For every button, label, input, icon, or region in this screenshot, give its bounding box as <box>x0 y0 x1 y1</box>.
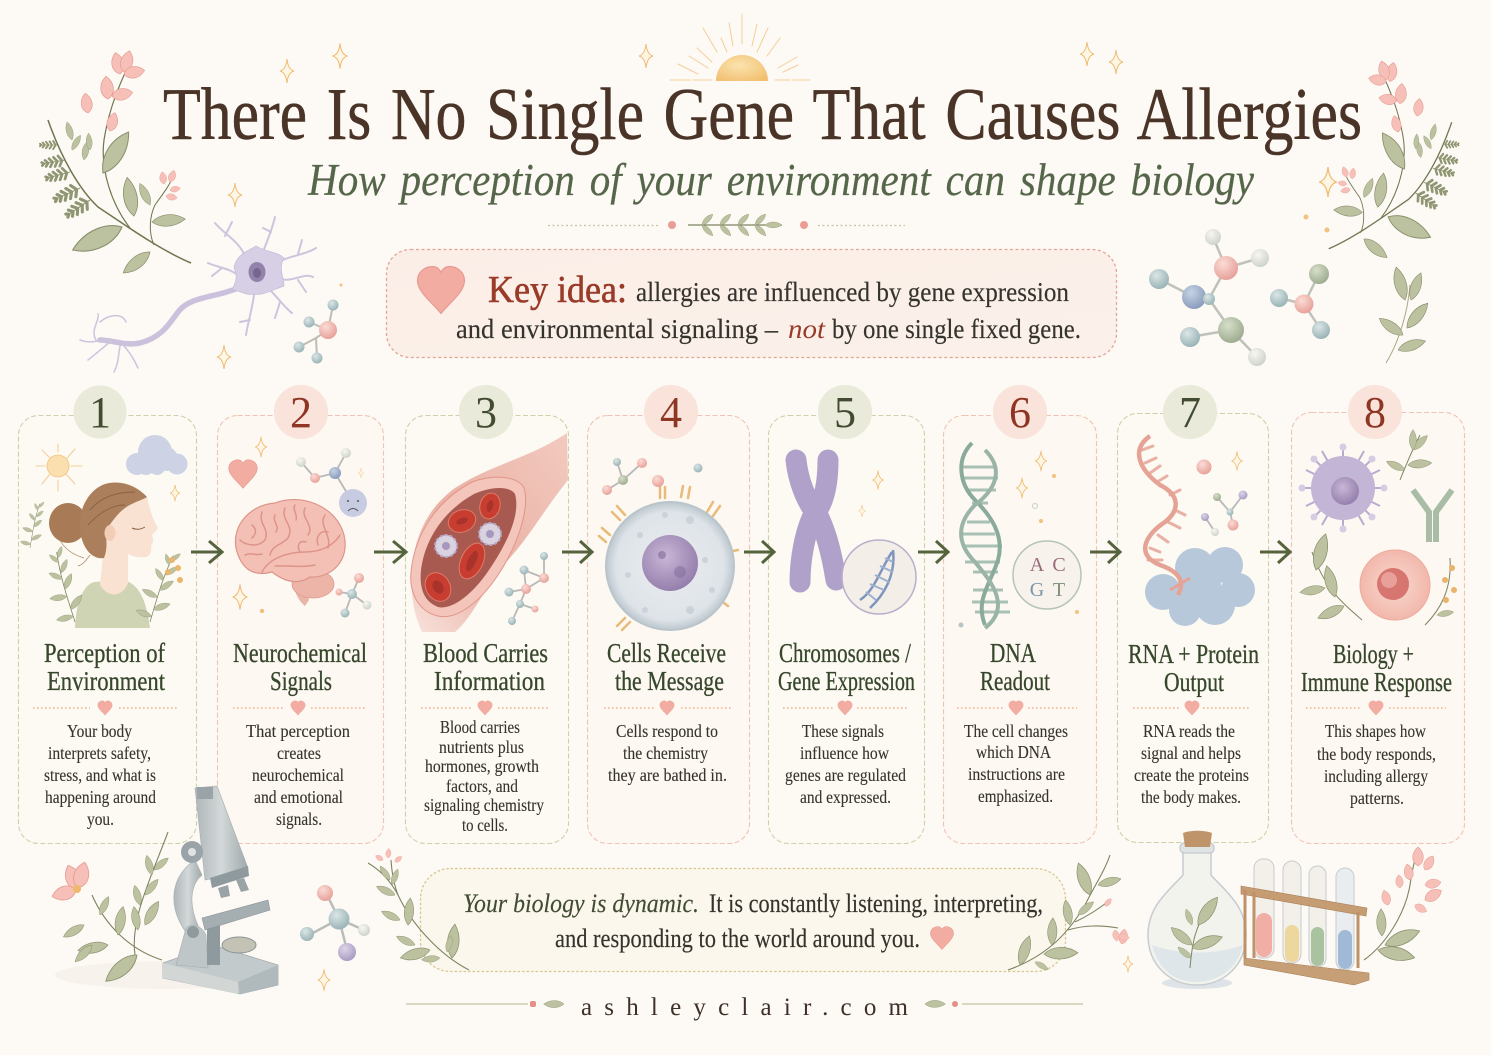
body text: Your body <box>67 721 132 741</box>
icon: cloud <box>126 435 188 475</box>
illustration: plants beside woman <box>16 485 183 630</box>
decoration: top-right floral branch <box>1329 60 1459 262</box>
divider with heart <box>957 701 1077 715</box>
body text: That perception <box>246 721 350 741</box>
heading: Cells Receive <box>607 638 726 668</box>
illustration: lower-left plant with flower <box>50 832 275 989</box>
body text <box>246 721 350 829</box>
divider with heart <box>421 701 550 715</box>
panel: key idea callout: not <box>788 314 827 344</box>
icon: heart <box>930 926 954 950</box>
body text <box>424 717 544 835</box>
panel: key idea callout: by one single fixed gene. <box>832 314 1081 344</box>
panel: closing message: and responding to the world around you. <box>555 924 920 953</box>
body text: nutrients plus <box>439 737 524 757</box>
illustration: lower-right plant with buds <box>1364 847 1444 964</box>
illustration: neuron <box>80 217 316 372</box>
body text: they are bathed in. <box>608 765 727 785</box>
arrow 2 to 3 <box>374 541 406 563</box>
divider with heart <box>33 701 179 715</box>
body text: and expressed. <box>800 787 891 807</box>
divider with heart <box>783 701 907 715</box>
body text <box>44 721 156 829</box>
body text: interprets safety, <box>48 743 151 763</box>
icon: sparkles <box>958 451 1079 628</box>
footer: website: ashleyclair.com <box>581 994 909 1021</box>
body text: Blood carries <box>440 717 520 737</box>
step 2 badge <box>274 385 328 439</box>
subtitle: How perception of your environment can shape biology <box>307 155 1254 205</box>
arrow 3 to 4 <box>562 541 592 563</box>
illustration: test tube rack <box>1241 859 1369 985</box>
step 8 panel: Biology + Immune Response <box>1292 385 1464 844</box>
step 2 panel: Neurochemical Signals: Signals <box>270 666 332 696</box>
icon: small sparkle lower right <box>1123 956 1133 972</box>
illustration: cell with receptors <box>599 475 738 630</box>
illustration: protein cloud <box>1145 547 1255 626</box>
panel: closing message: Your biology is dynamic. <box>463 889 699 918</box>
body text: emphasized. <box>978 786 1053 806</box>
arrow 6 to 7 <box>1090 541 1120 563</box>
illustration: microscope <box>163 786 278 994</box>
step 5 badge: 5 <box>834 388 856 437</box>
step 1 badge: 1 <box>89 388 111 437</box>
heading: Biology + <box>1333 639 1414 669</box>
illustration: blood vessel cross-section <box>411 433 568 632</box>
icon: small sparkle lower left <box>318 969 330 991</box>
icon: base letters circle <box>1013 541 1081 609</box>
body text: stress, and what is <box>44 765 156 785</box>
body text <box>1134 721 1249 807</box>
heading: RNA + Protein <box>1128 639 1259 669</box>
body text: This shapes how <box>1325 721 1426 741</box>
panel: closing message <box>420 868 1066 972</box>
icon: molecule with sad face <box>296 448 367 517</box>
heading: Neurochemical <box>233 638 367 668</box>
illustration: DNA helix <box>961 443 1010 628</box>
body text: the body makes. <box>1141 787 1241 807</box>
illustration: RNA strand <box>1139 436 1190 595</box>
step 6 badge: 6 <box>1009 388 1031 437</box>
body text: genes are regulated <box>785 765 906 785</box>
decorative divider with sprig <box>548 212 905 238</box>
divider with heart <box>1133 701 1251 715</box>
panel: key idea callout: Key idea: <box>488 269 627 311</box>
step 8 badge <box>1348 385 1402 439</box>
body text: instructions are <box>968 764 1065 784</box>
arrow 1 to 2 <box>191 541 222 563</box>
body text: and emotional <box>254 787 343 807</box>
illustration: large molecules top right <box>1149 229 1330 366</box>
heading: Chromosomes / <box>779 638 911 668</box>
body text: influence how <box>800 743 889 763</box>
step 2 panel: Neurochemical Signals <box>218 385 384 844</box>
body text: which DNA <box>976 742 1051 762</box>
decoration: branch right of closing message <box>1008 855 1130 972</box>
body text <box>608 721 727 785</box>
body text: patterns. <box>1350 788 1404 808</box>
step 7 panel: RNA + Protein Output: Output <box>1164 667 1224 697</box>
footer: website <box>406 994 1083 1021</box>
decoration: header sparkles <box>217 42 1337 369</box>
step 2 badge: 2 <box>290 388 312 437</box>
illustration: brain <box>235 500 345 606</box>
illustration: small molecule lower left <box>300 885 370 961</box>
illustration: pale leaf sprig top right <box>1376 266 1432 363</box>
decoration: top-left floral branch <box>40 49 191 278</box>
body text: RNA reads the <box>1143 721 1235 741</box>
panel: key idea callout: allergies are influenced by gene expression <box>636 277 1069 307</box>
icon: leaf sprig <box>1385 430 1432 480</box>
icon: base letters circle: G <box>1030 579 1044 601</box>
illustration: glass flask with plant <box>1148 831 1246 989</box>
panel: closing message: It is constantly listening, interpreting, <box>709 889 1043 918</box>
icon: sparkles <box>233 437 364 613</box>
body text: hormones, growth <box>425 756 539 776</box>
body text: neurochemical <box>252 765 344 785</box>
step 4 panel: Cells Receive the Message <box>588 385 750 844</box>
icon: heart <box>418 266 464 314</box>
body text: creates <box>277 743 321 763</box>
step 1 panel: Perception of Environment <box>16 386 196 844</box>
icon: rising sun <box>670 14 810 81</box>
body text: factors, and <box>446 776 518 796</box>
step 6 panel: DNA Readout <box>944 385 1096 844</box>
illustration: chromosome <box>796 460 836 582</box>
divider with heart <box>604 701 731 715</box>
icon: DNA magnifier circle <box>842 540 916 614</box>
icon: sun <box>36 444 82 491</box>
body text: signal and helps <box>1141 743 1241 763</box>
heading: Perception of <box>44 638 165 668</box>
body text: signaling chemistry <box>424 795 544 815</box>
body text: the body responds, <box>1317 744 1436 764</box>
decoration: branch left of closing message <box>368 848 469 970</box>
panel: key idea callout: and environmental signaling – <box>456 314 778 344</box>
body text: to cells. <box>462 815 508 835</box>
icon: base letters circle: T <box>1053 579 1065 601</box>
icon: base letters circle: A <box>1030 554 1045 576</box>
step 6 badge <box>993 385 1047 439</box>
heading: DNA <box>990 638 1036 668</box>
arrow 5 to 6 <box>918 541 948 563</box>
body text: you. <box>87 809 114 829</box>
step 7 panel: RNA + Protein Output <box>1118 385 1268 842</box>
step 7 badge <box>1163 385 1217 439</box>
step 1 panel: Perception of Environment: Environment <box>47 666 165 696</box>
icon: sparkles <box>858 470 884 517</box>
step 5 panel: Chromosomes / Gene Expression: Gene Expression <box>778 666 915 696</box>
illustration: pink cell <box>1360 550 1430 620</box>
icon: molecule above cell <box>602 458 702 495</box>
heading: Blood Carries <box>423 638 548 668</box>
step 4 badge: 4 <box>660 388 682 437</box>
body text <box>964 721 1068 806</box>
body text: including allergy <box>1324 766 1428 786</box>
illustration: small molecule near neuron <box>294 300 338 364</box>
step 3 panel: Blood Carries Information <box>406 385 568 844</box>
body text: These signals <box>802 721 884 741</box>
divider with heart <box>1306 701 1446 715</box>
step 5 badge <box>818 385 872 439</box>
icon: molecule <box>504 552 549 625</box>
divider with heart <box>233 701 365 715</box>
illustration: virus-like immune cell <box>1298 444 1388 532</box>
icon: heart <box>229 460 257 488</box>
step 3 badge <box>459 385 513 439</box>
body text: signals. <box>276 809 322 829</box>
icon: molecule and sparkle <box>1196 451 1248 536</box>
step 4 panel: Cells Receive the Message: the Message <box>615 666 724 696</box>
body text: create the proteins <box>1134 765 1249 785</box>
step 3 badge: 3 <box>475 388 497 437</box>
step 7 badge: 7 <box>1179 388 1201 437</box>
body text: the chemistry <box>623 743 708 763</box>
step 6 panel: DNA Readout: Readout <box>980 666 1050 696</box>
body text <box>1317 721 1436 808</box>
body text: Cells respond to <box>616 721 718 741</box>
arrow 7 to 8 <box>1260 541 1290 563</box>
body text: The cell changes <box>964 721 1068 741</box>
icon: antibody <box>1413 490 1452 542</box>
body text: happening around <box>45 787 156 807</box>
step 3 panel: Blood Carries Information: Information <box>434 666 545 696</box>
illustration: leaves and sprigs <box>1299 532 1457 625</box>
step 4 badge <box>644 385 698 439</box>
step 5 panel: Chromosomes / Gene Expression <box>768 385 924 844</box>
panel: key idea callout <box>386 250 1116 358</box>
body text <box>785 721 906 807</box>
arrow 4 to 5 <box>744 541 774 563</box>
step 8 badge: 8 <box>1364 388 1386 437</box>
icon: base letters circle: C <box>1052 554 1066 576</box>
illustration: woman profile <box>49 483 158 628</box>
step 1 badge <box>74 386 126 438</box>
icon: small molecule <box>336 573 372 618</box>
